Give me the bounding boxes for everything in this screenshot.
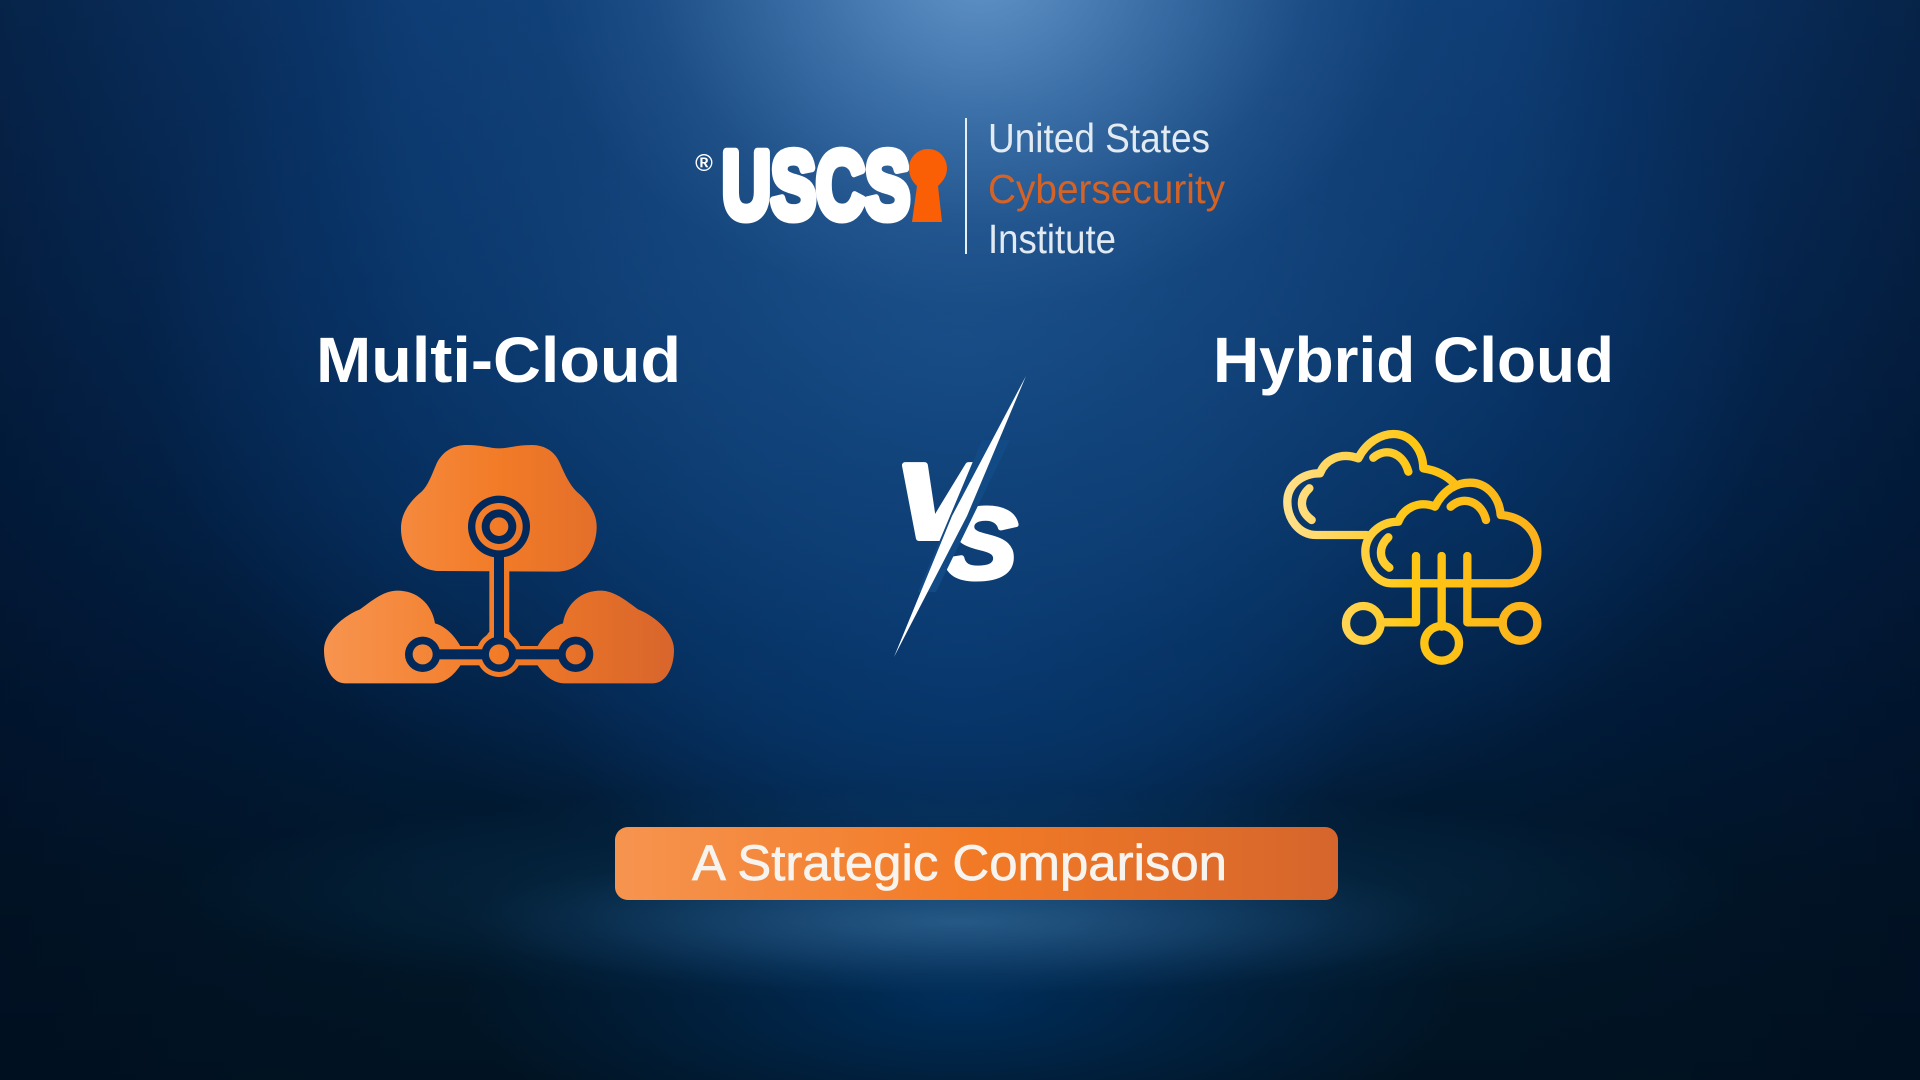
circuit lines	[1381, 556, 1503, 627]
logo text: Institute: Institute	[988, 216, 1116, 262]
slash gap	[918, 440, 1010, 592]
slash	[894, 376, 1026, 657]
right cloud	[537, 591, 674, 683]
top cloud	[401, 445, 597, 572]
icon: multi-cloud network	[324, 445, 674, 683]
network nodes	[405, 637, 593, 672]
front cloud highlights	[1381, 501, 1486, 568]
letter V: V	[895, 443, 989, 561]
icon: keyhole	[909, 149, 947, 222]
back cloud	[1287, 434, 1454, 535]
icon: VS slash	[894, 376, 1026, 657]
left cloud	[324, 591, 461, 683]
banner text: A Strategic Comparison	[692, 835, 1227, 891]
logo	[695, 115, 1225, 262]
circuit nodes	[1346, 606, 1537, 661]
logo registered mark: ®	[695, 150, 713, 177]
logo text: United States: United States	[988, 115, 1210, 161]
connector band	[423, 553, 577, 677]
letter S: S	[945, 488, 1017, 600]
heading: Multi-Cloud: Multi-Cloud	[316, 324, 681, 396]
back cloud highlights	[1302, 452, 1408, 520]
front cloud	[1365, 483, 1537, 583]
heading: Hybrid Cloud: Hybrid Cloud	[1213, 324, 1614, 396]
logo text: Cybersecurity: Cybersecurity	[988, 166, 1225, 212]
target node	[468, 496, 530, 558]
logo wordmark USCS: USCS	[722, 132, 910, 239]
banner	[615, 827, 1338, 900]
logo divider	[965, 118, 967, 254]
icon: hybrid cloud circuit	[1287, 434, 1537, 661]
banner background	[615, 827, 1338, 900]
